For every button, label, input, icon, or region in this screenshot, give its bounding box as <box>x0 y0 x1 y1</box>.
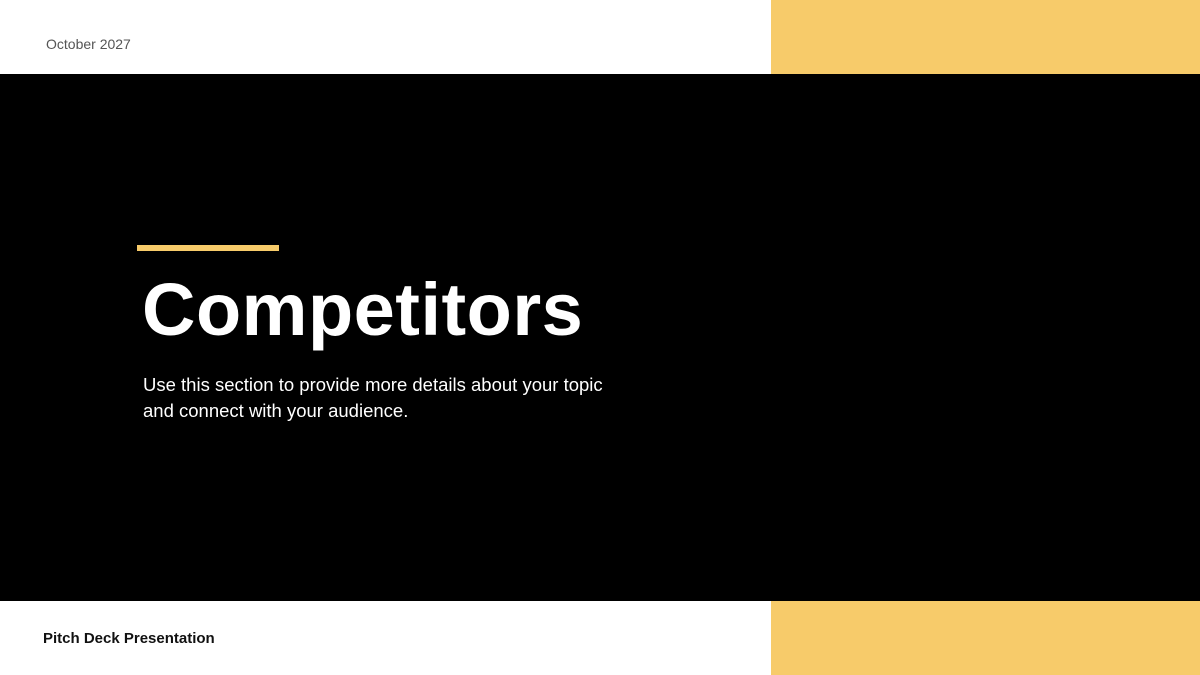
footer yellow block <box>771 601 1200 675</box>
header yellow block <box>771 0 1200 74</box>
main black panel <box>0 74 1200 601</box>
subtitle text: Use this section to provide more details about your topic and connect with your audience. <box>143 374 603 421</box>
date label: October 2027 <box>46 36 131 52</box>
accent line <box>137 245 279 251</box>
footer label: Pitch Deck Presentation <box>43 630 215 647</box>
title: Competitors <box>142 268 583 351</box>
